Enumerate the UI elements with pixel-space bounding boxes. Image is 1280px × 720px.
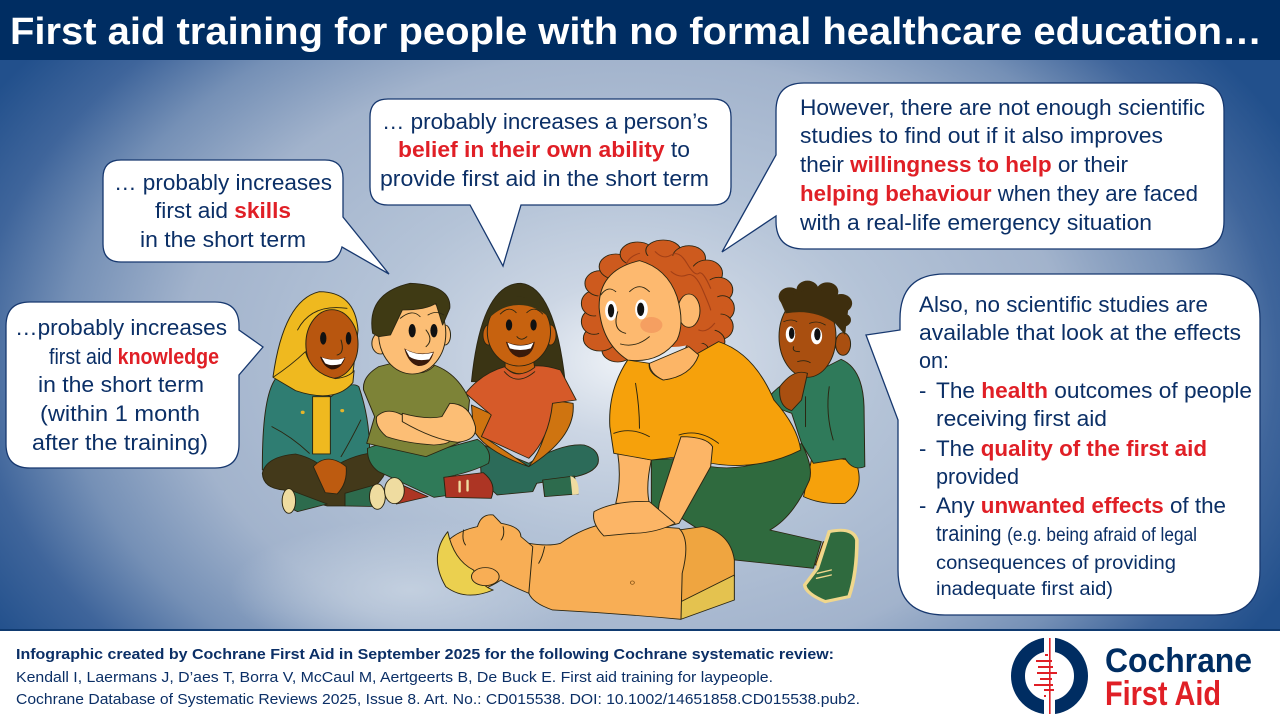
speech bubble: no studies available: inadequate first aid) — [936, 579, 1113, 600]
speech bubble: no studies available: The quality of the first aid — [936, 436, 1207, 461]
figure: instructor performing CPR — [581, 240, 857, 602]
logo: Cochrane First Aid — [1018, 636, 1252, 716]
speech bubble: skills — [103, 160, 389, 274]
speech bubble: not enough studies: with a real-life emergency situation — [799, 210, 1152, 235]
speech bubble: self-efficacy: provide first aid in the short term — [380, 166, 709, 191]
citation text: Cochrane Database of Systematic Reviews 2025, Issue 8. Art. No.: CD015538. DOI: 10.1002/14651858.CD015538.pub2. — [16, 691, 860, 708]
speech bubble: knowledge: …probably increases — [15, 315, 227, 340]
citation text: Infographic created by Cochrane First Aid in September 2025 for the following Cochrane systematic review: — [16, 646, 834, 663]
figure: boy in olive shirt — [363, 283, 493, 504]
speech bubble: not enough studies: their willingness to help or their — [800, 152, 1128, 177]
speech bubble: no studies available — [866, 274, 1260, 615]
title banner — [0, 0, 1280, 60]
speech bubble: knowledge: in the short term — [38, 372, 204, 397]
speech bubble: not enough studies: studies to find out if it also improves — [800, 123, 1163, 148]
speech bubble: no studies available: receiving first aid — [936, 406, 1107, 431]
speech bubble: self-efficacy: … probably increases a person’s — [382, 109, 708, 134]
speech bubble: no studies available: - — [919, 493, 926, 518]
illustration: first aid training group — [262, 240, 865, 619]
logo: Cochrane First Aid: Cochrane — [1105, 642, 1252, 680]
speech bubble: no studies available: - — [919, 378, 926, 403]
speech bubble: skills: … probably increases — [114, 170, 332, 195]
figure: girl in orange shirt — [466, 283, 598, 497]
speech bubble: no studies available: provided — [936, 464, 1019, 489]
title banner: First aid training for people with no formal healthcare education… — [10, 11, 1262, 53]
citation text: Kendall I, Laermans J, D’aes T, Borra V, McCaul M, Aertgeerts B, De Buck E. First aid training for laypeople. — [16, 669, 773, 686]
speech bubble: no studies available: on: — [919, 348, 949, 373]
speech bubble: skills: in the short term — [140, 227, 306, 252]
figure: boy in green hoodie — [769, 281, 865, 504]
speech bubble: no studies available: available that look at the effects — [919, 320, 1241, 345]
speech bubble: knowledge: after the training) — [32, 430, 208, 455]
speech bubble: self-efficacy — [370, 99, 731, 266]
footer — [0, 629, 1280, 720]
speech bubble: not enough studies: However, there are not enough scientific — [800, 95, 1205, 120]
speech bubble: no studies available: training (e.g. being afraid of legal — [936, 521, 1197, 546]
speech bubble: no studies available: Any unwanted effects of the — [936, 493, 1226, 518]
speech bubble: knowledge: first aid knowledge — [49, 344, 219, 369]
speech bubble: not enough studies — [722, 83, 1224, 252]
speech bubble: knowledge: (within 1 month — [40, 401, 200, 426]
speech bubble: no studies available: consequences of providing — [936, 553, 1176, 574]
figure: CPR manikin — [437, 437, 734, 619]
logo: Cochrane First Aid: First Aid — [1105, 675, 1221, 713]
speech bubble: skills: first aid skills — [155, 198, 291, 223]
citation text — [16, 646, 860, 708]
figure: girl in yellow hijab — [262, 292, 385, 513]
speech bubble: no studies available: Also, no scientific studies are — [919, 292, 1208, 317]
speech bubble: not enough studies: helping behaviour when they are faced — [800, 181, 1198, 206]
speech bubble: knowledge — [6, 302, 263, 468]
speech bubble: no studies available: - — [919, 436, 926, 461]
speech bubble: no studies available: The health outcomes of people — [936, 378, 1252, 403]
speech bubble: self-efficacy: belief in their own ability to — [398, 137, 690, 162]
